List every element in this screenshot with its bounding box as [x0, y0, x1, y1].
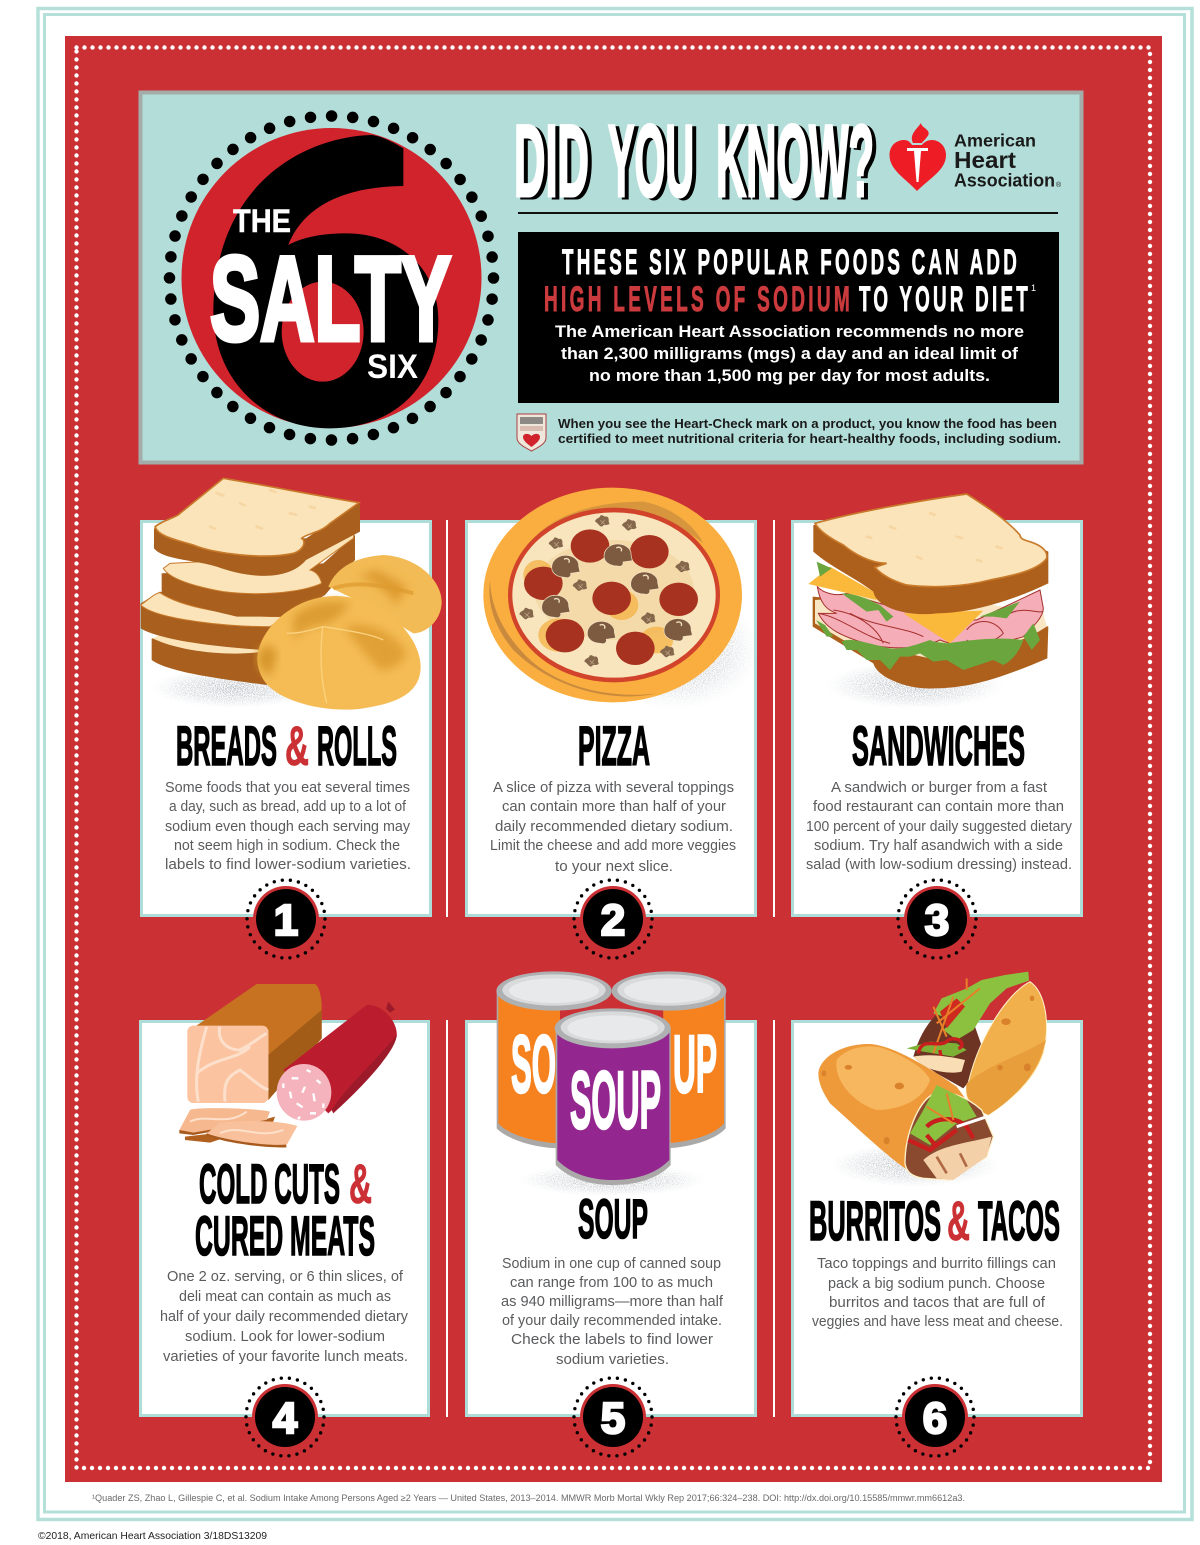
card 1: breads and rolls: ROLLS — [317, 714, 397, 777]
text: sandwiches description: salad (with low-sodium dressing) instead. — [806, 856, 1072, 873]
text: sandwiches description: 100 percent of your daily suggested dietary — [806, 818, 1072, 835]
card 3: sandwiches — [792, 494, 1082, 958]
text: burritos description: veggies and have less meat and cheese. — [812, 1313, 1063, 1330]
text: heart-check note — [558, 416, 1061, 446]
illustration: bread and rolls — [141, 478, 442, 710]
heading: did you know: DID — [518, 106, 593, 220]
badge: number 1: 1 — [274, 896, 298, 945]
text: soup description: of your daily recommended intake. — [502, 1312, 722, 1329]
copyright: ©2018, American Heart Association 3/18DS13209 — [38, 1530, 267, 1542]
text: breads description: sodium even though each serving may — [165, 818, 410, 835]
card 6: burritos and tacos — [792, 972, 1082, 1456]
text: sandwiches description: sodium. Try half asandwich with a side — [814, 837, 1063, 854]
card 2: pizza — [466, 488, 760, 958]
card 4: cold cuts and cured meats: CURED MEATS — [195, 1204, 375, 1267]
text: burritos description: Taco toppings and burrito fillings can — [817, 1255, 1056, 1272]
text: breads description: labels to find lower-sodium varieties. — [165, 856, 411, 873]
card 4: cold cuts and cured meats — [140, 984, 428, 1456]
illustration: sandwich — [808, 494, 1048, 688]
icon: heart-check mark — [517, 414, 546, 451]
logo: the salty six badge: SIX — [367, 348, 418, 386]
title: cold cuts and cured meats — [195, 1152, 375, 1267]
card 5: soup — [466, 971, 756, 1456]
badge: number 4: 4 — [273, 1394, 298, 1443]
text: pizza description: to your next slice. — [555, 858, 673, 875]
text: heart-check note: When you see the Heart-Check mark on a product, you know the food has been — [558, 416, 1057, 431]
callout: sodium recommendations: HIGH LEVELS OF SODIUM — [544, 280, 853, 319]
title: breads and rolls: BREADS — [176, 714, 277, 777]
text: soup description: Sodium in one cup of canned soup — [502, 1255, 721, 1272]
text: cold cuts description — [160, 1268, 408, 1365]
text: pizza description — [490, 779, 736, 875]
text: pizza description: can contain more than half of your — [502, 798, 726, 815]
text: cold cuts description: sodium. Look for lower-sodium — [185, 1328, 385, 1345]
text: breads description: not seem high in sodium. Check the — [174, 837, 400, 854]
column separators — [446, 520, 775, 1417]
badge: number 3 — [898, 880, 976, 958]
text: pizza description: daily recommended dietary sodium. — [495, 818, 733, 835]
logo: american heart association: American — [954, 130, 1036, 150]
text: pizza description: A slice of pizza with several toppings — [493, 779, 734, 796]
card 6: burritos and tacos: TACOS — [978, 1189, 1060, 1252]
logo: the salty six badge: THE — [233, 203, 291, 239]
text: breads description — [165, 779, 411, 873]
card 2: pizza: PIZZA — [578, 714, 650, 777]
callout: sodium recommendations — [518, 232, 1059, 403]
text: soup description: sodium varieties. — [556, 1351, 669, 1368]
title: cold cuts and cured meats: COLD CUTS — [199, 1152, 340, 1215]
badge: number 6: 6 — [923, 1394, 947, 1443]
callout: sodium recommendations: The American Heart Association recommends no more — [555, 322, 1024, 341]
illustration: pizza — [483, 488, 742, 702]
badge: number 6 — [896, 1378, 974, 1456]
logo: the salty six badge — [170, 116, 494, 440]
badge: number 4 — [246, 1378, 324, 1456]
badge: number 3: 3 — [925, 896, 949, 945]
heading: did you know — [514, 104, 878, 220]
illustration: soup cans: SO — [511, 1019, 556, 1110]
header panel: KNOW? — [720, 106, 878, 220]
badge: number 1 — [247, 880, 325, 958]
logo: american heart association: Association — [954, 170, 1055, 190]
text: cold cuts description: varieties of your favorite lunch meats. — [163, 1348, 408, 1365]
text: heart-check note: certified to meet nutritional criteria for heart-healthy foods, including sodium. — [558, 431, 1061, 446]
header panel — [140, 92, 1082, 462]
heading: did you know: YOU — [612, 106, 698, 220]
heading: did you know: YOU — [608, 104, 694, 218]
text: soup description — [501, 1255, 724, 1368]
card 5: soup: SOUP — [578, 1187, 648, 1250]
text: sandwiches description: food restaurant can contain more than — [813, 798, 1064, 815]
text: cold cuts description: One 2 oz. serving, or 6 thin slices, of — [167, 1268, 404, 1285]
logo: american heart association — [890, 123, 1062, 191]
heading: did you know: DID — [514, 104, 589, 218]
card 5: soup: UP — [673, 1019, 717, 1110]
card 1: breads and rolls — [141, 478, 442, 958]
text: soup description: Check the labels to find lower — [511, 1331, 713, 1348]
illustration: soup cans — [496, 971, 726, 1185]
logo: american heart association: Heart — [954, 147, 1016, 173]
text: sandwiches description — [806, 779, 1072, 873]
text: cold cuts description: deli meat can contain as much as — [179, 1288, 391, 1305]
title: breads and rolls: & — [285, 714, 309, 777]
footnote: ¹Quader ZS, Zhao L, Gillespie C, et al. Sodium Intake Among Persons Aged ≥2 Years — United States, 2013–2014. MMWR Morb Mortal Wkly Rep 2017;66:324–238. DOI: http://dx.doi.org/10.15585/mmwr.mm6612a3. — [92, 1493, 965, 1503]
logo: the salty six badge: SALTY — [210, 232, 451, 366]
callout: sodium recommendations: TO YOUR DIET — [859, 280, 1031, 319]
text: soup description: can range from 100 to as much — [510, 1274, 713, 1291]
badge: number 2: 2 — [601, 896, 625, 945]
badge: number 5: 5 — [601, 1394, 625, 1443]
title: burritos and tacos: & — [947, 1189, 970, 1252]
text: breads description: Some foods that you eat several times — [165, 779, 410, 796]
text: burritos description — [812, 1255, 1063, 1330]
illustration: soup cans: SOUP — [570, 1055, 661, 1146]
logo: american heart association: ® — [1056, 181, 1062, 189]
callout: sodium recommendations: than 2,300 milligrams (mgs) a day and an ideal limit of — [561, 344, 1018, 363]
illustration: burrito and taco — [818, 972, 1047, 1180]
text: burritos description: burritos and tacos that are full of — [829, 1294, 1046, 1311]
badge: number 5 — [574, 1378, 652, 1456]
title: cold cuts and cured meats: & — [349, 1152, 372, 1215]
callout: sodium recommendations: 1 — [1031, 283, 1036, 293]
text: sandwiches description: A sandwich or burger from a fast — [831, 779, 1048, 796]
text: cold cuts description: half of your daily recommended dietary — [160, 1308, 408, 1325]
text: pizza description: Limit the cheese and add more veggies — [490, 837, 736, 854]
illustration: cold cuts and salami — [179, 984, 397, 1147]
badge: number 2 — [574, 880, 652, 958]
text: burritos description: pack a big sodium punch. Choose — [828, 1275, 1045, 1292]
text: breads description: a day, such as bread, add up to a lot of — [169, 798, 407, 815]
callout: sodium recommendations: no more than 1,500 mg per day for most adults. — [589, 366, 990, 385]
header panel: KNOW? — [716, 104, 874, 218]
text: soup description: as 940 milligrams—more than half — [501, 1293, 724, 1310]
title: burritos and tacos: BURRITOS — [809, 1189, 941, 1252]
